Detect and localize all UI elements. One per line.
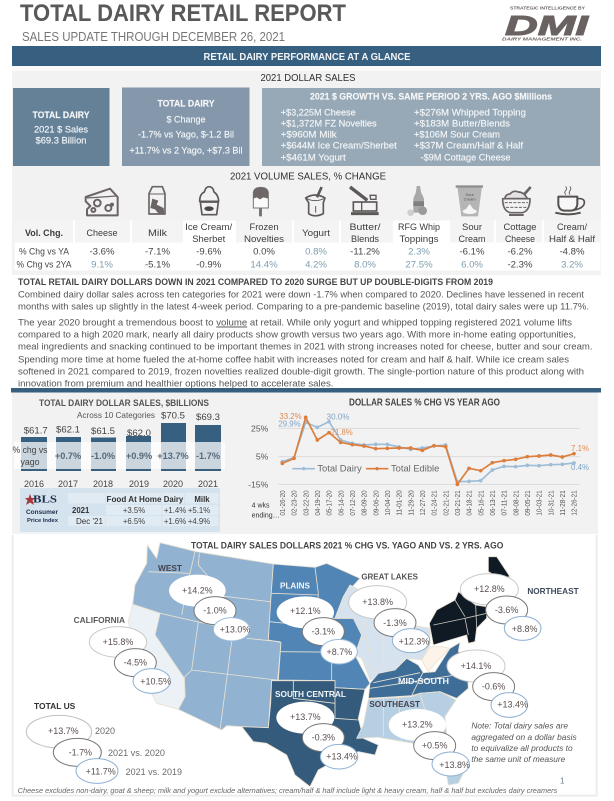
callout: great lakes: +12.3% — [399, 637, 429, 647]
line chart: dollar sales percent change vs year ago: 11-28-21 — [558, 490, 567, 516]
panel: 2021 growth vs two years ago: +$276M Whipped Topping — [414, 108, 526, 118]
line chart: dollar sales percent change vs year ago: 09-06-20 — [371, 490, 380, 516]
region labels: MID-SOUTH — [398, 676, 449, 686]
icon: milk carton — [149, 187, 165, 214]
region labels: NORTHEAST — [527, 586, 579, 596]
panel: BLS consumer price index: +1.4% — [164, 506, 186, 515]
table: volume change: Ice Cream/ — [185, 222, 233, 233]
callout: southeast — [389, 709, 470, 776]
table: volume change: Cheese — [86, 228, 118, 239]
panel: charts background — [12, 392, 598, 534]
icon: yogurt — [306, 187, 325, 216]
table: volume change: Half & Half — [549, 234, 595, 245]
panel: BLS consumer price index: Dec '21 — [76, 517, 103, 526]
callout: plains — [277, 596, 357, 664]
panel: 2021 growth vs two years ago: +$1,372M FZ Novelties — [281, 118, 377, 130]
panel: total dairy change: +11.7% vs 2 Yago, +$7.3 Bil — [130, 146, 242, 156]
bar chart: total dairy dollar sales: +0.9% — [126, 451, 152, 461]
callout: total US legend: +13.7% — [48, 726, 79, 736]
table: volume change: Butter/ — [350, 222, 381, 233]
panel: BLS consumer price index: 2021 — [72, 506, 90, 515]
bar chart: total dairy dollar sales: $62.0 — [127, 428, 151, 439]
table: volume change: -6.2% — [507, 246, 533, 258]
table: volume change: RFG Whip — [398, 222, 440, 233]
table: volume change: Sour — [462, 222, 483, 233]
bar chart: total dairy dollar sales: $62.1 — [56, 424, 80, 436]
panel: BLS consumer price index: +3.5% — [123, 506, 145, 515]
heading: 2021 volume sales: 2021 VOLUME SALES, % CHANGE — [230, 172, 386, 182]
page number: 1 — [560, 777, 565, 786]
bar chart: total dairy dollar sales: -1.7% — [196, 451, 220, 461]
heading: 2021 dollar sales: 2021 DOLLAR SALES — [260, 73, 356, 84]
callout: plains: +8.7% — [326, 647, 352, 657]
bar chart: total dairy dollar sales: -1.0% — [91, 451, 115, 461]
callout: california: -4.5% — [124, 658, 147, 668]
callout: northeast: +12.8% — [474, 584, 505, 594]
line chart: dollar sales percent change vs year ago: 06-13-21 — [488, 490, 497, 516]
panel: BLS consumer price index: +4.9% — [188, 517, 210, 526]
panel: BLS consumer price index: Food At Home — [106, 495, 162, 504]
table: volume change: Cream/ — [557, 222, 587, 233]
line chart: dollar sales percent change vs year ago: 29.9% — [278, 418, 301, 428]
bar chart: total dairy dollar sales — [12, 398, 225, 489]
icon: frozen novelty — [253, 187, 268, 216]
line chart: dollar sales percent change vs year ago: 10-31-21 — [546, 490, 555, 516]
callout: total US legend: 2021 vs. 2020 — [108, 748, 165, 758]
map: US regions — [128, 543, 510, 787]
line chart: dollar sales percent change vs year ago: 09-05-21 — [523, 490, 532, 516]
line chart: dollar sales percent change vs year ago: 07-11-21 — [500, 490, 509, 516]
icon: sour cream tub: Sour — [465, 192, 475, 197]
table: volume change: 8.0% — [354, 260, 376, 270]
note: the same unit of measure — [471, 754, 565, 764]
line chart: dollar sales percent change vs year ago: 11-29-20 — [406, 490, 415, 516]
line chart: dollar sales percent change vs year ago: 5% — [256, 451, 269, 461]
line chart: dollar sales percent change vs year ago: Total Dairy — [317, 464, 362, 474]
note — [471, 721, 577, 764]
region labels — [34, 563, 579, 711]
table: volume change: 9.1% — [91, 260, 113, 270]
panel: 2021 growth vs two years ago: +$183M Butter/Blends — [414, 118, 510, 130]
callout: west: +13.0% — [220, 625, 250, 635]
callout: california: +10.5% — [140, 677, 171, 687]
bar chart: total dairy dollar sales: 2017 — [58, 479, 78, 489]
callout: mid-south: +13.4% — [497, 700, 528, 710]
callout: total US legend — [26, 715, 182, 783]
line chart: dollar sales percent change vs year ago: 33.2% — [279, 411, 302, 421]
line chart: dollar sales percent change vs year ago: 01-24-21 — [430, 490, 439, 516]
icon: sour cream tub: Cream — [464, 196, 476, 201]
bar chart: total dairy dollar sales: $69.3 — [196, 412, 220, 423]
bar chart: total dairy dollar sales: +13.7% — [157, 451, 189, 461]
callout: total US legend: -1.7% — [69, 748, 92, 758]
panel: 2021 growth vs two years ago: +$106M Sour Cream — [414, 130, 500, 140]
table: volume change: 27.5% — [405, 260, 433, 270]
line chart: dollar sales percent change vs year ago: 08-08-21 — [511, 490, 520, 516]
line chart: dollar sales percent change vs year ago: 10-03-21 — [535, 490, 544, 516]
icon: coffee cup — [555, 186, 584, 214]
note: aggregated on a dollar basis — [471, 732, 577, 742]
logo: DMI: DAIRY MANAGEMENT INC. — [502, 36, 582, 42]
table: volume change: Vol. Chg. — [25, 228, 63, 239]
text block: commentary: Spending more time at home fueled the at-home coffee habit with increases noted for cream and half & half. While ice cream sales — [18, 354, 569, 366]
line chart: dollar sales percent change vs year ago: 10-04-20 — [383, 490, 392, 516]
bar chart: total dairy dollar sales: % chg vs — [12, 445, 48, 455]
callout: plains: -3.1% — [312, 627, 335, 637]
table: volume change: 6.0% — [461, 260, 483, 270]
text block: commentary: compared to a high 2020 mark, nearly all dairy products show growth versus two years ago. With more in-home eating opportunities, — [18, 330, 576, 340]
line chart: dollar sales percent change vs year ago: Total Edible — [391, 464, 439, 474]
text block: commentary: innovation from premium and healthier options helped to accelerate sales. — [18, 378, 334, 390]
callout: mid-south — [447, 650, 528, 717]
bar chart: total dairy dollar sales: +0.7% — [55, 451, 81, 461]
line chart: dollar sales percent change vs year ago: DOLLAR SALES % CHG VS YEAR AGO — [349, 397, 500, 408]
icon: cheese — [86, 189, 118, 215]
logo: DMI: STRATEGIC INTELLIGENCE BY — [510, 6, 585, 10]
bar chart: total dairy dollar sales: yago — [20, 457, 40, 467]
table: volume change: 14.4% — [250, 260, 278, 270]
line chart: dollar sales percent change vs year ago: -15% — [248, 479, 269, 489]
panel: 2021 growth vs two years ago: +$644M Ice Cream/Sherbet — [281, 140, 397, 152]
text block: commentary: months with sales up slightly in the latest 4-week period. Comparing to a pre-pandemic baseline (2019), total dairy sales were up 11.7%. — [18, 302, 589, 312]
callout: southeast: +0.5% — [422, 741, 448, 751]
table: volume change: % Chg vs YA — [19, 246, 69, 256]
panel: BLS consumer price index: +1.6% — [164, 517, 186, 526]
line chart: dollar sales percent change vs year ago: 03-22-20 — [301, 490, 310, 516]
callout: great lakes — [349, 586, 430, 653]
text block: commentary: The year 2020 brought a tremendous boost to volume at retail. While only yogurt and whipped topping registered 2021 volume lifts — [18, 318, 572, 328]
icon: whip topping can — [407, 186, 427, 216]
icon: butter dish — [350, 187, 379, 214]
line chart: dollar sales percent change vs year ago: 4 wks — [252, 503, 270, 510]
table: volume change: 0.0% — [253, 246, 275, 258]
map heading: TOTAL DAIRY SALES DOLLARS 2021 % CHG VS. YAGO AND VS. 2 YRS. AGO — [191, 541, 503, 551]
panel: BLS consumer price index: BLS — [33, 494, 57, 506]
logo: DMI: DMI — [505, 10, 590, 41]
panel: total dairy change: $ Change — [166, 114, 206, 126]
callout: california: +15.8% — [103, 637, 133, 647]
panel: total dairy sales: TOTAL DAIRY — [32, 110, 90, 121]
table: volume change: Cream — [458, 234, 486, 245]
callout: northeast — [460, 574, 541, 640]
table: volume change: Milk — [148, 228, 167, 239]
line chart: dollar sales percent change vs year ago: 08-09-20 — [360, 490, 369, 516]
line chart: dollar sales percent change vs year ago: 25% — [251, 423, 269, 433]
callout: total US legend: 2021 vs. 2019 — [126, 767, 182, 777]
line chart: dollar sales percent change vs year ago: 07-12-20 — [348, 490, 357, 516]
line chart: dollar sales percent change vs year ago — [248, 397, 589, 519]
table: volume change: % Chg vs 2YA — [16, 260, 72, 270]
line chart: dollar sales percent change vs year ago: 05-16-21 — [476, 490, 485, 516]
callout: west — [169, 575, 250, 641]
callout: mid-south: +14.1% — [461, 661, 491, 671]
table: volume change: Toppings — [400, 234, 439, 245]
region labels: SOUTH CENTRAL — [275, 689, 347, 699]
table: volume change: Cottage — [504, 222, 536, 233]
panel: 2021 growth vs two years ago: 2021 $ GROWTH VS. SAME PERIOD 2 YRS. AGO $Millions — [310, 92, 552, 102]
line chart: dollar sales percent change vs year ago: 7.1% — [571, 443, 589, 453]
panel: BLS consumer price index: Dairy — [164, 495, 184, 504]
title: TOTAL DAIRY RETAIL REPORT — [20, 0, 346, 27]
panel: at a glance background — [12, 46, 601, 275]
table: volume change: -9.6% — [196, 246, 222, 258]
table: volume change: -2.3% — [507, 260, 533, 270]
line chart: dollar sales percent change vs year ago: 12-26-21 — [570, 490, 579, 516]
panel: BLS consumer price index: +6.5% — [123, 517, 145, 526]
bar chart: total dairy dollar sales: 2020 — [163, 479, 183, 489]
table: volume change: Sherbet — [192, 234, 226, 245]
region labels: TOTAL US — [34, 701, 76, 711]
line chart: dollar sales percent change vs year ago: 0.4% — [571, 462, 589, 472]
table: volume change: 3.2% — [561, 260, 583, 270]
panel: BLS consumer price index: Price Index — [27, 518, 59, 524]
panel: total dairy sales — [13, 88, 110, 166]
panel: 2021 growth vs two years ago — [262, 88, 600, 166]
callout: south central: +13.4% — [326, 752, 357, 762]
icon: cottage cheese bowl — [503, 187, 531, 215]
line chart: dollar sales percent change vs year ago: 02-23-20 — [290, 490, 299, 516]
banner heading — [12, 46, 601, 66]
panel: BLS consumer price index — [20, 488, 220, 532]
line chart: dollar sales percent change vs year ago: ending… — [252, 512, 280, 519]
line chart: dollar sales percent change vs year ago: 11-01-20 — [395, 490, 404, 516]
logo: DMI — [502, 6, 590, 42]
bar chart: total dairy dollar sales: 2016 — [24, 479, 44, 489]
line chart: dollar sales percent change vs year ago: 02-21-21 — [441, 490, 450, 516]
callout: california — [89, 627, 171, 693]
table: volume change: -5.1% — [145, 260, 171, 270]
table: volume change: 4.2% — [305, 260, 327, 270]
table: volume change: -4.8% — [559, 246, 585, 258]
icon: ice cream tub — [200, 187, 219, 215]
line chart: dollar sales percent change vs year ago: 12-27-20 — [418, 490, 427, 516]
line chart: dollar sales percent change vs year ago: 30.0% — [327, 412, 350, 422]
state lines — [148, 552, 487, 742]
subtitle: SALES UPDATE THROUGH DECEMBER 26, 2021 — [22, 30, 285, 44]
table: volume change: Novelties — [244, 234, 284, 245]
text block: commentary: Combined dairy dollar sales across ten categories for 2021 were down -1.7% when compared to 2020. Declines have lessened in recent — [18, 290, 584, 300]
table: volume change: 2.3% — [408, 246, 430, 258]
line chart: dollar sales percent change vs year ago: 05-17-20 — [325, 490, 334, 516]
callout: west: -1.0% — [203, 606, 227, 616]
callout: total US legend: +11.7% — [86, 767, 116, 777]
panel: 2021 growth vs two years ago: +$37M Cream/Half & Half — [414, 140, 523, 152]
line chart: dollar sales percent change vs year ago: 04-19-20 — [313, 490, 322, 516]
text block: commentary: TOTAL RETAIL DAIRY DOLLARS DOWN IN 2021 COMPARED TO 2020 SURGE BUT UP DOUBLE-DIGITS FROM 2019 — [18, 277, 493, 288]
table: volume change: -0.9% — [196, 260, 222, 270]
line chart: dollar sales percent change vs year ago: 03-21-21 — [453, 490, 462, 516]
panel: BLS consumer price index: Consumer — [26, 509, 58, 516]
panel: 2021 growth vs two years ago: +$461M Yogurt — [281, 152, 346, 164]
table: volume change: Blends — [351, 234, 379, 245]
table: volume change: -11.2% — [350, 246, 380, 258]
table: volume change: -3.6% — [89, 246, 115, 258]
bar chart: total dairy dollar sales: 2018 — [93, 479, 113, 489]
callout: south central: +13.7% — [290, 712, 321, 722]
line chart: dollar sales percent change vs year ago: 01-26-20 — [278, 490, 287, 516]
callout: great lakes: -1.3% — [383, 618, 407, 628]
panel: 2021 growth vs two years ago: -$9M Cottage Cheese — [420, 152, 510, 164]
callout: total US legend: 2020 — [95, 726, 115, 736]
panel: total dairy change — [122, 88, 250, 166]
text block: commentary — [12, 275, 601, 390]
bar chart: total dairy dollar sales: $70.5 — [161, 410, 185, 422]
callout: northeast: +8.8% — [512, 624, 538, 634]
region labels: WEST — [158, 563, 183, 573]
panel: 2021 growth vs two years ago: +$960M Milk — [281, 130, 337, 140]
table: volume change: -7.1% — [145, 246, 171, 258]
panel: BLS consumer price index: Milk — [194, 495, 210, 504]
table: volume change: 0.8% — [305, 246, 327, 258]
bar chart: total dairy dollar sales: $61.7 — [24, 426, 48, 436]
banner heading: RETAIL DAIRY PERFORMANCE AT A GLANCE — [204, 51, 410, 63]
table: volume change: -6.1% — [459, 246, 485, 258]
table: volume change: Yogurt — [302, 228, 330, 239]
line chart: dollar sales percent change vs year ago: 06-14-20 — [336, 490, 345, 516]
line chart: dollar sales percent change vs year ago: 04-18-21 — [465, 490, 474, 516]
panel: total dairy change: TOTAL DAIRY — [158, 98, 215, 110]
bar chart: total dairy dollar sales: $61.5 — [91, 426, 115, 437]
text block: commentary: meal ingredients and snacking continued to be important themes in 2021 with strong increases noted for cheese, butter and sour cream. — [18, 342, 592, 352]
callout: southeast: +13.8% — [439, 760, 470, 770]
table: volume change: Frozen — [250, 222, 278, 233]
bar chart: total dairy dollar sales: 2021 — [198, 479, 218, 489]
region labels: PLAINS — [280, 581, 310, 591]
panel: 2021 growth vs two years ago: +$3,225M Cheese — [281, 108, 356, 118]
panel: total dairy change: -1.7% vs Yago, $-1.2 Bil — [138, 130, 234, 140]
bar chart: total dairy dollar sales: Across 10 Categories — [77, 410, 155, 420]
footnote: Cheese excludes non-dairy, goat & sheep; milk and yogurt exclude alternatives; cream/half & half include light & heavy cream, half & half but excludes dairy creamers — [18, 788, 558, 795]
panel: total dairy sales: $69.3 Billion — [36, 136, 86, 146]
bar chart: total dairy dollar sales: TOTAL DAIRY DOLLAR SALES, $BILLIONS — [39, 398, 210, 409]
icon: sour cream tub — [456, 185, 483, 216]
table: volume change — [14, 220, 600, 270]
table: volume change: Cheese — [505, 234, 535, 245]
region labels: SOUTHEAST — [369, 699, 421, 709]
callout: northeast: -3.6% — [495, 605, 518, 615]
note: Note: Total dairy sales are — [471, 721, 568, 731]
callout: mid-south: -0.6% — [482, 682, 505, 692]
panel: map section — [13, 535, 597, 796]
callout: south central: -0.3% — [312, 733, 335, 743]
callout: southeast: +13.2% — [402, 720, 433, 730]
line chart: dollar sales percent change vs year ago: 21.8% — [331, 427, 353, 437]
callout: south central — [276, 702, 358, 769]
panel: total dairy sales: 2021 $ Sales — [34, 124, 88, 136]
callout: great lakes: +13.8% — [362, 597, 393, 607]
note: to equivalize all products to — [471, 743, 573, 753]
callout: plains: +12.1% — [290, 606, 321, 616]
region labels: GREAT LAKES — [361, 572, 418, 582]
text block: commentary: softened in 2021 compared to 2019, frozen novelties realized double-digit growth. The single-portion nature of this product along with — [18, 366, 584, 378]
panel: BLS consumer price index: +5.1% — [188, 506, 210, 515]
bar chart: total dairy dollar sales: 2019 — [129, 479, 149, 489]
region labels: CALIFORNIA — [74, 615, 126, 625]
callout: west: +14.2% — [182, 585, 213, 595]
